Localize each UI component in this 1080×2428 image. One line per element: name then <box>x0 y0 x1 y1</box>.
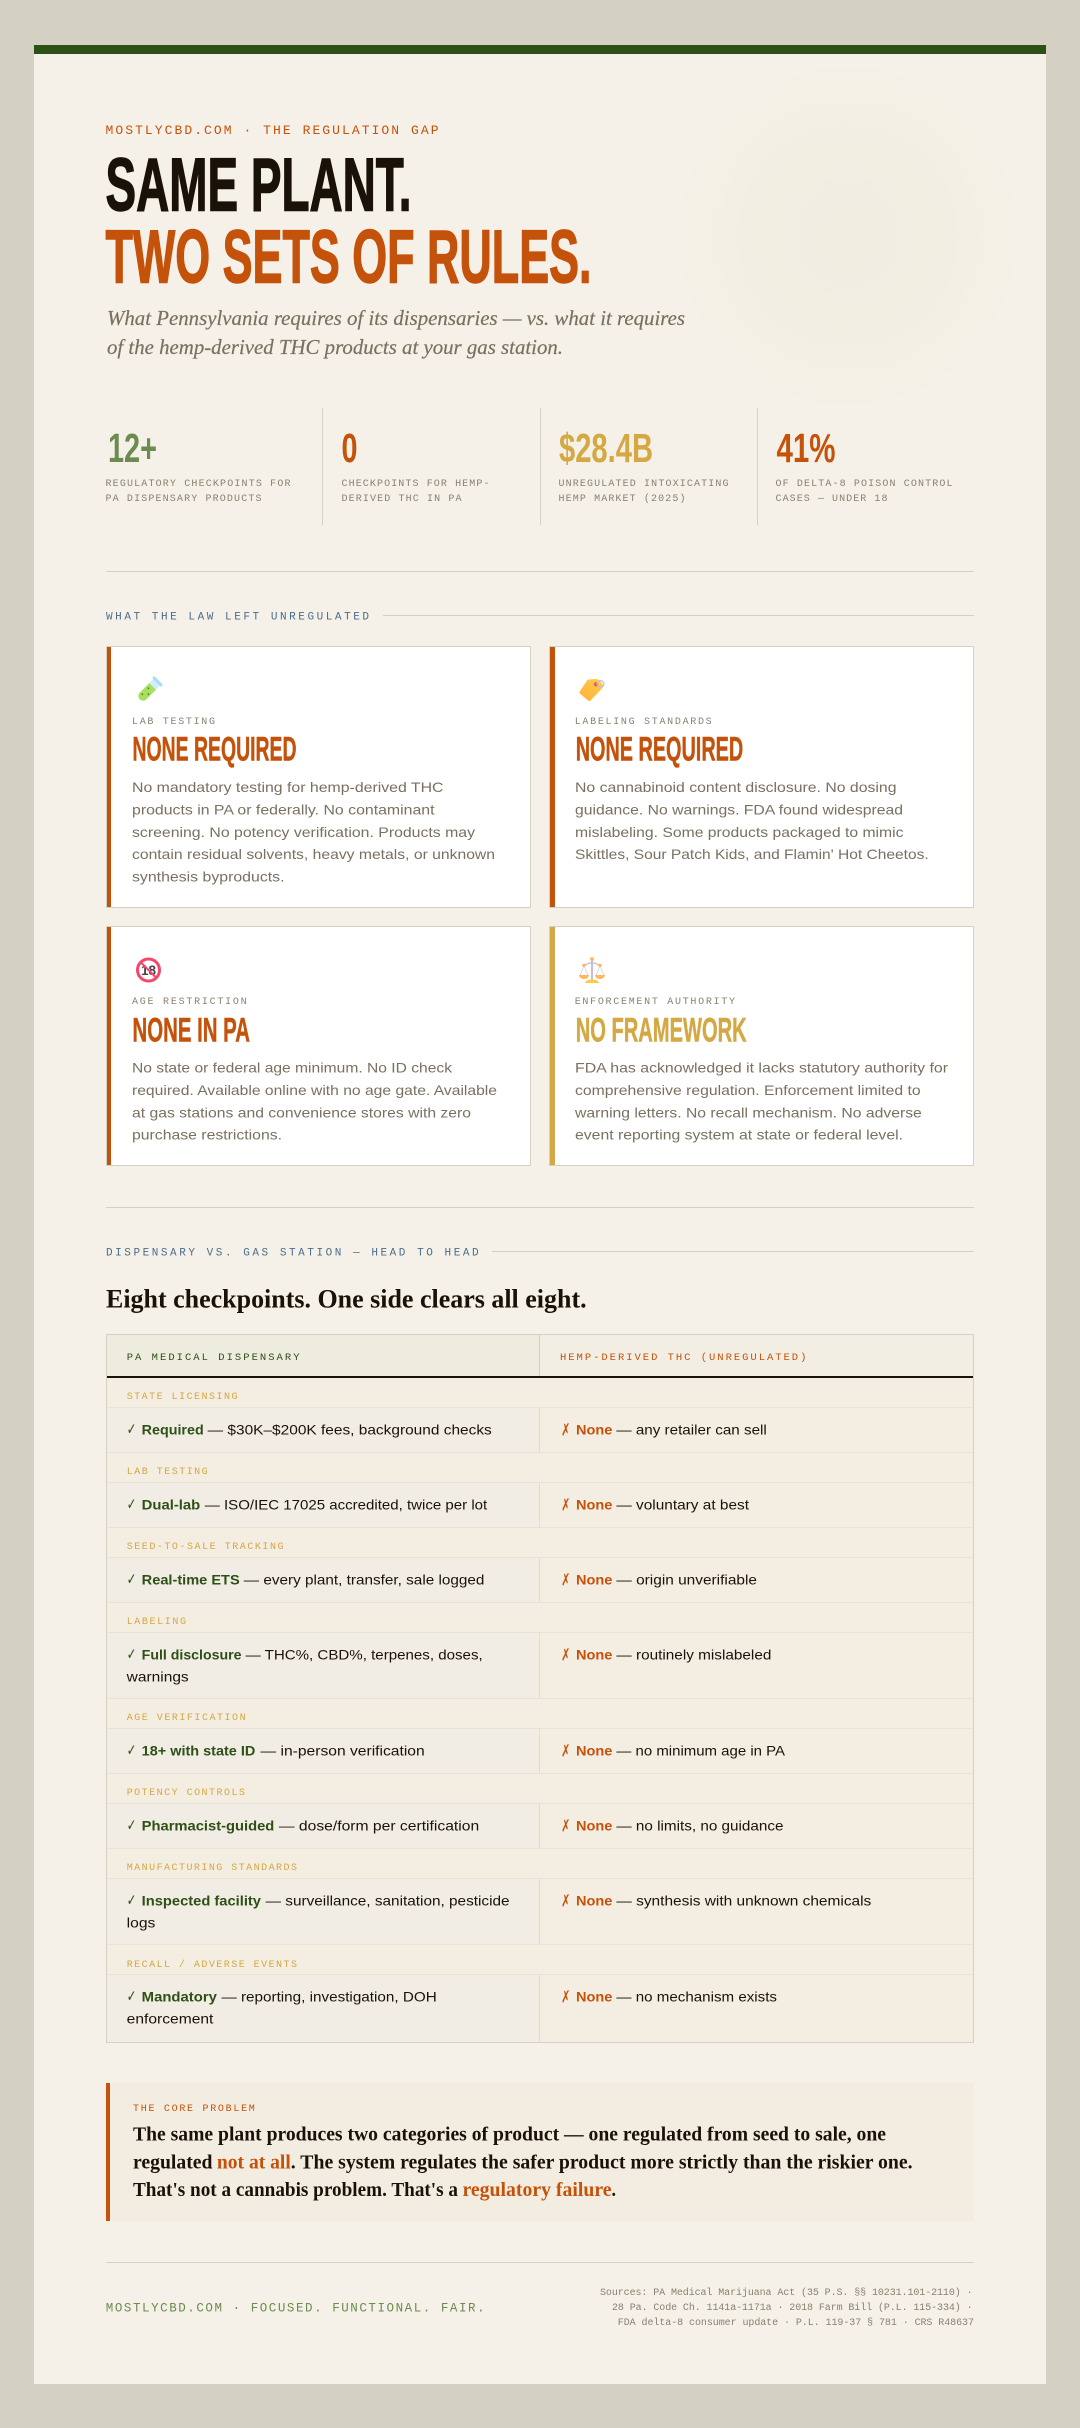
checkpoint: lab testing: ✓ <box>127 1495 136 1514</box>
checkpoint: labeling: ✗ <box>561 1646 570 1666</box>
checkpoint: seed-to-sale tracking: — origin unverifiable <box>616 1571 757 1587</box>
checkpoint: lab testing: Dual-lab <box>142 1496 200 1512</box>
checkpoint: manufacturing standards: — surveillance, sanitation, pesticide <box>266 1892 510 1908</box>
stat: 0 checkpoints: CHECKPOINTS FOR HEMP- <box>342 479 490 490</box>
checkpoint: labeling <box>107 1617 973 1699</box>
eyebrow: MOSTLYCBD.COM · THE REGULATION GAP <box>106 123 439 138</box>
checkpoint: lab testing: LAB TESTING <box>127 1467 208 1478</box>
checkpoint: labeling: — routinely mislabeled <box>616 1646 771 1662</box>
callout label: THE CORE PROBLEM <box>133 2104 255 2115</box>
checkpoint: potency controls: POTENCY CONTROLS <box>127 1788 245 1799</box>
callout text: That's not a cannabis problem. That's a <box>133 2179 458 2201</box>
section label: what the law left unregulated: WHAT THE LAW LEFT UNREGULATED <box>106 612 369 624</box>
stat: 12+ checkpoints: 12+ <box>108 425 157 471</box>
checkpoint: manufacturing standards <box>107 1863 973 1945</box>
checkpoint: labeling: — THC%, CBD%, terpenes, doses, <box>246 1646 483 1662</box>
stat: 41% under 18: OF DELTA-8 POISON CONTROL <box>776 479 952 490</box>
card body: No mandatory testing for hemp-derived THC <box>132 779 444 795</box>
checkpoint: state licensing: — any retailer can sell <box>616 1421 767 1437</box>
checkpoint: seed-to-sale tracking: — every plant, transfer, sale logged <box>244 1571 484 1587</box>
checkpoint: labeling: warnings <box>126 1668 189 1684</box>
section label: dispensary vs gas station: DISPENSARY VS. GAS STATION — HEAD TO HEAD <box>106 1248 479 1260</box>
footer brand line: MOSTLYCBD.COM · FOCUSED. FUNCTIONAL. FAIR. <box>106 2302 485 2316</box>
card verdict: NONE REQUIRED <box>576 730 743 768</box>
checkpoint: seed-to-sale tracking: ✗ <box>561 1571 570 1591</box>
checkpoint: state licensing: Required <box>142 1421 204 1437</box>
checkpoint: recall and adverse events: — no mechanism exists <box>616 1988 777 2004</box>
checkpoint: manufacturing standards: MANUFACTURING STANDARDS <box>127 1863 297 1874</box>
checkpoint: lab testing: — voluntary at best <box>616 1496 749 1512</box>
card verdict: NONE IN PA <box>132 1011 250 1049</box>
card label: LAB TESTING <box>132 717 215 728</box>
card label: AGE RESTRICTION <box>132 997 247 1008</box>
panel: age restriction <box>106 926 530 1166</box>
card body: contain residual solvents, heavy metals, or unknown <box>132 846 495 862</box>
card body: warning letters. No recall mechanism. No adverse <box>574 1104 922 1120</box>
checkpoint: potency controls: ✓ <box>127 1816 136 1835</box>
stat: 12+ checkpoints: REGULATORY CHECKPOINTS FOR <box>106 479 290 490</box>
card body <box>574 1060 948 1143</box>
checkpoint: manufacturing standards: logs <box>127 1914 155 1930</box>
card verdict: NONE REQUIRED <box>132 730 296 768</box>
stat: 0 checkpoints: 0 <box>342 425 358 471</box>
checkpoint: seed-to-sale tracking: ✓ <box>127 1570 136 1589</box>
comparison table <box>106 1334 974 2042</box>
checkpoint: potency controls: — dose/form per certification <box>279 1817 479 1833</box>
footer sources: Sources: PA Medical Marijuana Act (35 P.S. §§ 10231.101-2110) · <box>600 2287 973 2299</box>
checkpoint: recall and adverse events: RECALL / ADVERSE EVENTS <box>127 1959 297 1971</box>
checkpoint: manufacturing standards: ✓ <box>127 1891 136 1910</box>
subtitle <box>107 306 685 359</box>
checkpoint: seed-to-sale tracking <box>107 1542 973 1603</box>
card body <box>132 1060 497 1143</box>
table header <box>107 1335 973 1378</box>
checkpoint: seed-to-sale tracking: None <box>576 1571 613 1587</box>
card body: at gas stations and convenience stores with zero <box>132 1104 471 1120</box>
card body: purchase restrictions. <box>132 1127 282 1143</box>
checkpoint: potency controls: — no limits, no guidance <box>616 1817 784 1833</box>
table header: HEMP-DERIVED THC (UNREGULATED) <box>560 1352 806 1364</box>
panel: labeling standards <box>550 646 974 908</box>
header block <box>106 123 685 359</box>
callout text: not at all <box>217 2151 291 2173</box>
panel: enforcement authority <box>550 926 974 1166</box>
stat: 41% under 18: CASES — UNDER 18 <box>776 494 888 505</box>
icon: no under 18 <box>138 959 160 981</box>
checkpoint: state licensing <box>107 1392 973 1453</box>
stat: $28.4B market: UNREGULATED INTOXICATING <box>558 479 728 490</box>
stat: 12+ checkpoints: PA DISPENSARY PRODUCTS <box>106 494 262 505</box>
stat: 41% under 18 <box>776 425 952 505</box>
checkpoint: manufacturing standards: None <box>576 1892 613 1908</box>
stat: $28.4B market: HEMP MARKET (2025) <box>558 493 686 505</box>
footer sources: 28 Pa. Code Ch. 1141a-1171a · 2018 Farm Bill (P.L. 115-334) · <box>612 2302 973 2314</box>
icon: tag <box>579 679 604 701</box>
title line one: SAME PLANT. <box>106 142 412 226</box>
card label: LABELING STANDARDS <box>575 717 712 728</box>
icon: no under 18: 18 <box>141 963 156 978</box>
table header: PA MEDICAL DISPENSARY <box>127 1352 300 1364</box>
checkpoint: manufacturing standards: — synthesis with unknown chemicals <box>616 1892 871 1908</box>
subtitle: of the hemp-derived THC products at your gas station. <box>107 335 563 359</box>
footer <box>106 2287 974 2329</box>
checkpoint: age verification: ✓ <box>127 1741 136 1760</box>
checkpoint: labeling: Full disclosure <box>142 1646 242 1662</box>
card body: mislabeling. Some products packaged to mimic <box>575 824 904 840</box>
stat: 12+ checkpoints <box>106 425 290 505</box>
callout text: The same plant produces two categories of product — one regulated from seed to sale, one <box>133 2124 886 2146</box>
card body: screening. No potency verification. Products may <box>132 824 475 840</box>
top accent bar <box>34 45 1046 54</box>
callout: the core problem <box>106 2083 974 2221</box>
checkpoint: state licensing: ✓ <box>127 1420 136 1439</box>
footer sources: FDA delta-8 consumer update · P.L. 119-37 § 781 · CRS R48637 <box>618 2317 974 2329</box>
card body: No state or federal age minimum. No ID check <box>132 1060 453 1076</box>
checkpoint: recall and adverse events: enforcement <box>127 2010 214 2026</box>
card body: products in PA or federally. No contaminant <box>132 801 435 817</box>
checkpoint: lab testing: — ISO/IEC 17025 accredited, twice per lot <box>205 1496 487 1512</box>
checkpoint: recall and adverse events: Mandatory <box>142 1988 217 2004</box>
callout text: regulatory failure <box>462 2179 612 2201</box>
checkpoint: labeling: ✓ <box>127 1645 136 1664</box>
card body: guidance. No warnings. FDA found widespread <box>575 801 903 817</box>
stats row <box>106 408 952 525</box>
card body <box>575 779 929 862</box>
background glow <box>668 56 1028 416</box>
callout text: regulated <box>133 2151 212 2173</box>
checkpoint: state licensing: — $30K–$200K fees, background checks <box>208 1421 492 1437</box>
checkpoint: age verification: None <box>576 1742 613 1758</box>
stat: 41% under 18: 41% <box>776 425 836 471</box>
checkpoint: potency controls: Pharmacist-guided <box>142 1817 274 1833</box>
checkpoint: recall and adverse events: None <box>576 1988 613 2004</box>
checkpoint: recall and adverse events: ✗ <box>561 1988 570 2008</box>
checkpoint: lab testing <box>107 1467 973 1528</box>
checkpoint: age verification <box>107 1713 973 1774</box>
icon: balance scales <box>579 957 605 983</box>
checkpoint: lab testing: None <box>576 1496 613 1512</box>
card verdict: NO FRAMEWORK <box>576 1011 747 1049</box>
card body: No cannabinoid content disclosure. No dosing <box>575 779 896 795</box>
checkpoint: recall and adverse events <box>107 1959 973 2042</box>
checkpoint: labeling: LABELING <box>127 1617 186 1628</box>
checkpoint: potency controls: None <box>576 1817 613 1833</box>
stat: 0 checkpoints <box>342 425 490 505</box>
callout text <box>133 2124 913 2201</box>
checkpoint: potency controls: ✗ <box>561 1817 570 1837</box>
card body: event reporting system at state or federal level. <box>575 1127 903 1143</box>
card body <box>132 779 495 885</box>
stat: $28.4B market: $28.4B <box>559 425 653 471</box>
checkpoint: state licensing: STATE LICENSING <box>127 1392 238 1403</box>
stat: 0 checkpoints: DERIVED THC IN PA <box>342 494 462 505</box>
checkpoint: state licensing: None <box>576 1421 613 1437</box>
title line two: TWO SETS OF RULES. <box>106 214 592 298</box>
checkpoint: potency controls <box>107 1788 973 1849</box>
icon: test tube <box>135 676 163 704</box>
checkpoint: seed-to-sale tracking: SEED-TO-SALE TRACKING <box>127 1542 284 1553</box>
checkpoint: recall and adverse events: — reporting, investigation, DOH <box>222 1988 437 2004</box>
checkpoint: labeling: None <box>576 1646 613 1662</box>
card body: FDA has acknowledged it lacks statutory authority for <box>575 1060 948 1076</box>
checkpoint: age verification: AGE VERIFICATION <box>127 1713 246 1724</box>
card body: required. Available online with no age gate. Available <box>132 1082 497 1098</box>
checkpoint: state licensing: ✗ <box>561 1421 570 1441</box>
checkpoint: manufacturing standards: ✗ <box>561 1892 570 1912</box>
card body: synthesis byproducts. <box>132 869 284 885</box>
checkpoint: age verification: 18+ with state ID <box>142 1742 255 1758</box>
stat: $28.4B market <box>558 425 728 505</box>
checkpoint: age verification: ✗ <box>561 1742 570 1762</box>
footer sources <box>600 2287 974 2329</box>
checkpoint: lab testing: ✗ <box>561 1496 570 1516</box>
checkpoint: recall and adverse events: ✓ <box>127 1987 136 2006</box>
card body: comprehensive regulation. Enforcement limited to <box>575 1082 921 1098</box>
card label: ENFORCEMENT AUTHORITY <box>575 997 735 1008</box>
callout text: . <box>612 2179 616 2201</box>
checkpoint: age verification: — no minimum age in PA <box>616 1742 786 1758</box>
checkpoint: manufacturing standards: Inspected facility <box>142 1892 261 1908</box>
checkpoint: age verification: — in-person verification <box>260 1742 425 1758</box>
card body: Skittles, Sour Patch Kids, and Flamin' Hot Cheetos. <box>575 846 929 862</box>
checkpoint: seed-to-sale tracking: Real-time ETS <box>142 1571 240 1587</box>
callout text: . The system regulates the safer product more strictly than the riskier one. <box>291 2151 913 2173</box>
panel: lab testing <box>106 646 530 908</box>
section heading: Eight checkpoints. One side clears all eight. <box>106 1284 587 1313</box>
subtitle: What Pennsylvania requires of its dispensaries — vs. what it requires <box>107 306 685 330</box>
